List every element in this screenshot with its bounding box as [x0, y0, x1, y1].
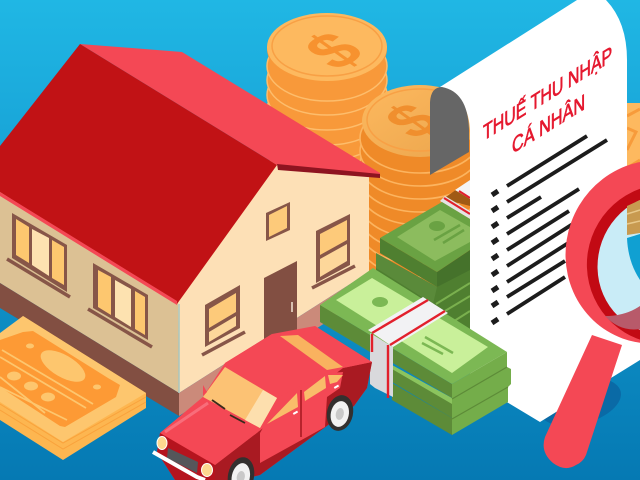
paper curl — [430, 87, 469, 175]
magnifier: inner rim — [564, 162, 640, 366]
tax document — [430, 0, 640, 422]
magnifier: outer rim — [540, 135, 640, 369]
shadow under magnifier — [534, 370, 626, 434]
car: rear wheel — [324, 393, 356, 433]
lower left layers — [320, 305, 370, 352]
car: windshield — [203, 367, 277, 428]
car: side windows — [267, 375, 343, 424]
left side face — [320, 305, 452, 398]
house: front wall — [170, 160, 369, 393]
magnifying glass — [540, 135, 640, 468]
house: window 3 — [202, 285, 245, 355]
coin stack: front: $ — [370, 93, 454, 148]
car: front face — [157, 433, 215, 480]
car: side body — [215, 362, 372, 480]
magnifier: handle — [544, 335, 622, 468]
car: hood — [160, 397, 258, 465]
car: door panels — [260, 372, 343, 463]
car: mirror — [203, 385, 207, 396]
banknote stack: orange — [0, 316, 146, 460]
magnifier: lens — [578, 176, 640, 352]
car — [153, 326, 372, 480]
house: front base — [179, 272, 369, 416]
house: roof front — [0, 44, 277, 304]
house — [0, 44, 380, 416]
house: roof side — [80, 44, 380, 176]
car: wipers — [212, 400, 245, 423]
money stack: front — [320, 268, 511, 435]
coin stack: right edge — [627, 103, 640, 233]
document bullets — [492, 191, 498, 323]
document title — [483, 41, 612, 159]
money stack: back — [376, 180, 470, 330]
document title: THUẾ THU NHẬP — [483, 41, 612, 146]
coin stack: back: $ — [289, 21, 379, 80]
car: trunk — [298, 326, 372, 368]
paper sheet — [440, 0, 640, 422]
car: roof — [225, 334, 327, 398]
document title: CÁ NHÂN — [512, 89, 585, 159]
car: front wheel — [224, 455, 258, 480]
house: door — [264, 261, 297, 350]
car: silhouette — [157, 326, 372, 480]
top note — [320, 268, 507, 384]
coin stack: back — [267, 13, 387, 175]
house: window 2 — [88, 263, 152, 347]
car: bumper — [153, 452, 205, 480]
house: window 1 — [7, 213, 70, 297]
paper band — [368, 297, 448, 398]
house: side base — [0, 283, 179, 416]
house: window 4 — [312, 214, 355, 288]
house: window 5 — [266, 202, 290, 241]
document text lines — [507, 136, 607, 314]
right side faces — [452, 352, 511, 435]
car: rear window — [280, 335, 343, 370]
coin stack: front — [360, 85, 480, 290]
house: side wall — [0, 185, 179, 393]
